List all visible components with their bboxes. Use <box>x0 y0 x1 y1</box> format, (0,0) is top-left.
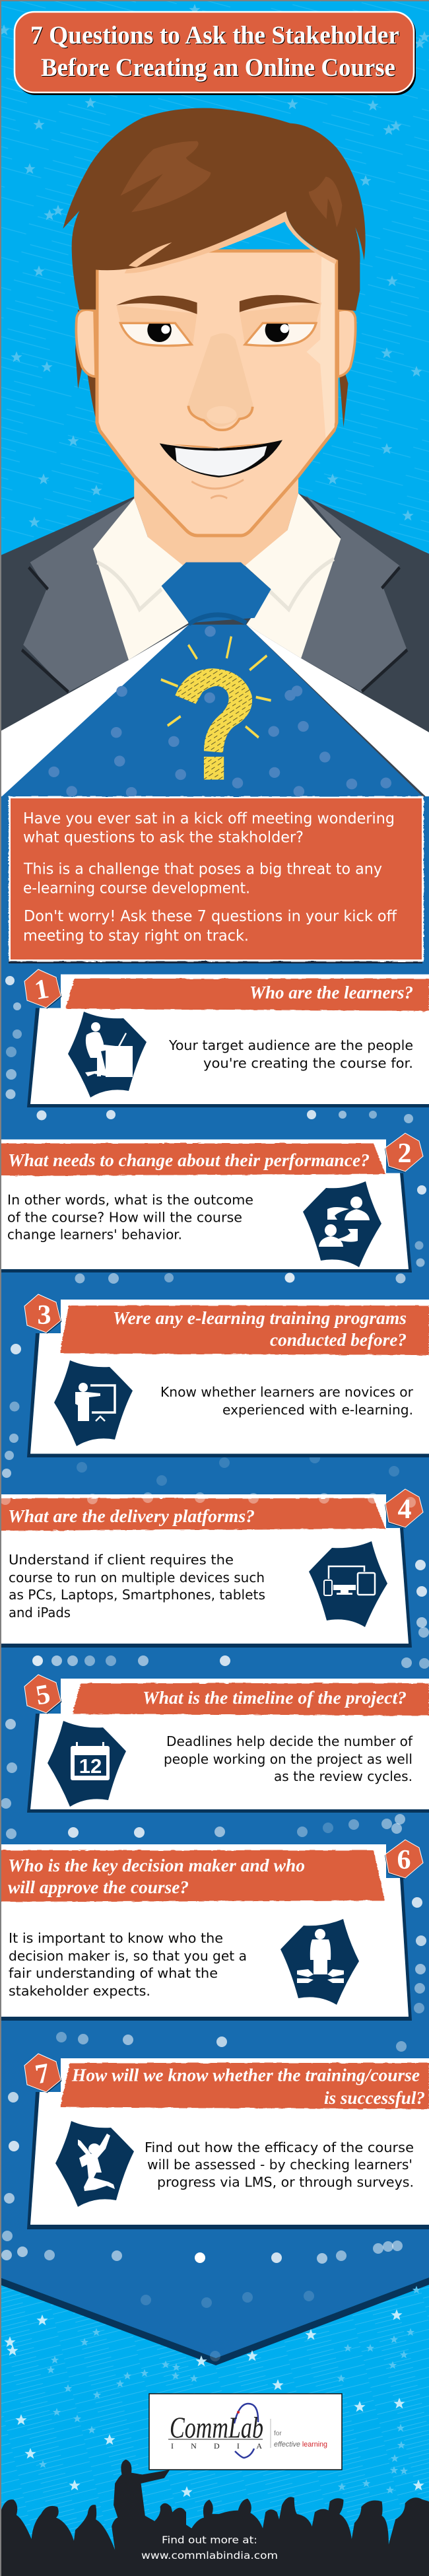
translucent dots over panels 4 heading <box>0 1492 416 1508</box>
panel: question 2 <box>0 1133 423 1272</box>
heading: How will we know whether the training/course <box>71 2066 420 2085</box>
icon: people exchanging <box>303 1181 381 1267</box>
lapels <box>23 495 407 692</box>
collar shadows <box>97 559 334 609</box>
footer text: Find out more at: <box>162 2534 257 2546</box>
heading bar <box>60 2063 429 2109</box>
logo arcs <box>234 2404 258 2458</box>
panel: question 2: change learners' behavior. <box>7 1227 182 1243</box>
title banner: 7 Questions to Ask the Stakeholder <box>30 21 399 50</box>
panel: question 6: will approve the course? <box>8 1877 189 1897</box>
panel: question 1: you're creating the course for. <box>203 1055 413 1071</box>
face <box>97 251 337 536</box>
badge <box>385 1489 423 1528</box>
panel: question 7: is successful? <box>324 2088 425 2108</box>
heading bar <box>60 1305 429 1355</box>
heading: What is the timeline of the project? <box>143 1688 407 1708</box>
heading bar <box>0 1498 385 1531</box>
panel: intro: meeting to stay right on track. <box>23 927 249 944</box>
heading bar <box>0 1144 385 1175</box>
panel: question 3: conducted before? <box>270 1330 407 1350</box>
badge <box>24 969 62 1009</box>
logo: CommLab India <box>149 2394 342 2470</box>
heading: What needs to change about their performance? <box>8 1150 370 1170</box>
panel: question 4: course to run on multiple devices such <box>9 1570 265 1585</box>
decorative dots on blue section <box>1 976 429 2361</box>
panel: question 5: people working on the project as well <box>164 1751 412 1767</box>
body text: Your target audience are the people <box>168 1037 413 1053</box>
panel: question 6: stakeholder expects. <box>9 1983 150 1999</box>
panel: question 6: fair understanding of what the <box>9 1965 218 1981</box>
mouth <box>160 440 282 499</box>
heading: Were any e-learning training programs <box>113 1308 407 1328</box>
panel: intro: This is a challenge that poses a big threat to any <box>23 861 382 878</box>
panel: question 6 <box>0 1840 423 2021</box>
white shirt band <box>0 625 429 800</box>
heading: Who are the learners? <box>249 983 413 1002</box>
eyebrows <box>116 295 320 314</box>
icon: calendar: 12 <box>79 1755 102 1778</box>
icon: jumping learner <box>55 2121 134 2207</box>
logo: CommLab India: for <box>274 2430 282 2437</box>
suit jacket <box>0 493 429 800</box>
panel: question 3: experienced with e-learning. <box>222 1402 413 1418</box>
badge <box>24 1675 62 1714</box>
panel: intro: e-learning course development. <box>23 880 250 897</box>
face features <box>116 211 337 438</box>
panel: intro: Don't worry! Ask these 7 questions in your kick off <box>24 908 397 925</box>
panel: question 1 <box>24 969 429 1107</box>
badge <box>385 1133 423 1173</box>
panel: question 6: decision maker is, so that you get a <box>9 1948 247 1964</box>
heading: Who is the key decision maker and who <box>8 1856 305 1875</box>
lapel notches <box>22 567 407 692</box>
heading: What are the delivery platforms? <box>8 1506 255 1526</box>
footer text <box>141 2534 278 2561</box>
panel: question 4: as PCs, Laptops, Smartphones, tablets <box>9 1587 265 1603</box>
footer text: www.commlabindia.com <box>141 2550 278 2561</box>
tie knot <box>162 563 271 623</box>
panel: question 5: as the review cycles. <box>274 1768 412 1784</box>
tie blade <box>0 625 424 798</box>
panel: question 3 <box>24 1294 429 1457</box>
badge <box>24 2054 62 2093</box>
badge: 1 <box>32 974 51 1006</box>
nose <box>187 333 253 427</box>
body of character: suit, shirt, neck and tie <box>0 463 429 800</box>
heading bar <box>65 979 429 1011</box>
badge: 5 <box>34 1679 53 1711</box>
icon: decision maker <box>280 1919 359 2005</box>
body text: In other words, what is the outcome <box>7 1192 253 1208</box>
neck <box>134 463 298 566</box>
badge: 4 <box>397 1494 412 1525</box>
panel: intro: Have you ever sat in a kick off meeting wondering <box>23 810 395 827</box>
tie dots <box>48 626 391 798</box>
badge <box>385 1840 423 1879</box>
ears <box>76 310 356 376</box>
body text: Deadlines help decide the number of <box>166 1733 413 1749</box>
heading bar <box>0 1850 385 1902</box>
title banner <box>15 12 416 95</box>
blue body section with chevron <box>0 796 429 2365</box>
shirt collar <box>93 493 341 660</box>
panel: intro <box>9 796 424 963</box>
body text: Understand if client requires the <box>9 1552 234 1568</box>
badge <box>24 1294 62 1334</box>
logo: CommLab India: effective learning <box>274 2441 327 2449</box>
body text: Know whether learners are novices or <box>160 1384 414 1400</box>
eyes <box>120 323 316 346</box>
character head: hair back, ears and face <box>63 108 366 536</box>
icon: calendar <box>48 1721 126 1807</box>
icon: presenter at board <box>54 1360 133 1446</box>
panel: question 7: progress via LMS, or through surveys. <box>157 2174 414 2190</box>
panel: question 5 <box>24 1675 429 1813</box>
decorative stars: upper sky <box>0 4 429 527</box>
hair <box>63 108 366 311</box>
decorative stars: lower sky <box>4 2286 424 2497</box>
back hair and sideburns <box>75 310 348 429</box>
title banner: Before Creating an Online Course <box>41 53 395 82</box>
panel: question 7 <box>24 2054 429 2229</box>
panel: question 4 <box>0 1489 423 1648</box>
badge: 2 <box>397 1138 412 1169</box>
badge: 3 <box>37 1300 51 1331</box>
body text: Find out how the efficacy of the course <box>145 2140 414 2155</box>
audience silhouette <box>0 2460 429 2576</box>
body text: It is important to know who the <box>9 1930 223 1946</box>
logo: CommLab India: I N D I A <box>171 2441 262 2451</box>
badge: 6 <box>397 1845 411 1875</box>
panel: question 4: and iPads <box>9 1605 71 1620</box>
heading bar <box>73 1683 429 1716</box>
icon: devices <box>309 1541 387 1627</box>
icon: question mark with rays <box>161 637 271 780</box>
panel: intro: what questions to ask the stakholder? <box>23 829 304 847</box>
eyelids <box>116 302 321 345</box>
badge: 7 <box>33 2058 52 2090</box>
panel: question 7: will be assessed - by checking learners' <box>147 2157 412 2173</box>
logo: CommLab India: CommLab <box>170 2410 263 2445</box>
icon: learner at desk <box>68 1012 147 1097</box>
panel: question 2: of the course? How will the course <box>7 1210 242 1226</box>
